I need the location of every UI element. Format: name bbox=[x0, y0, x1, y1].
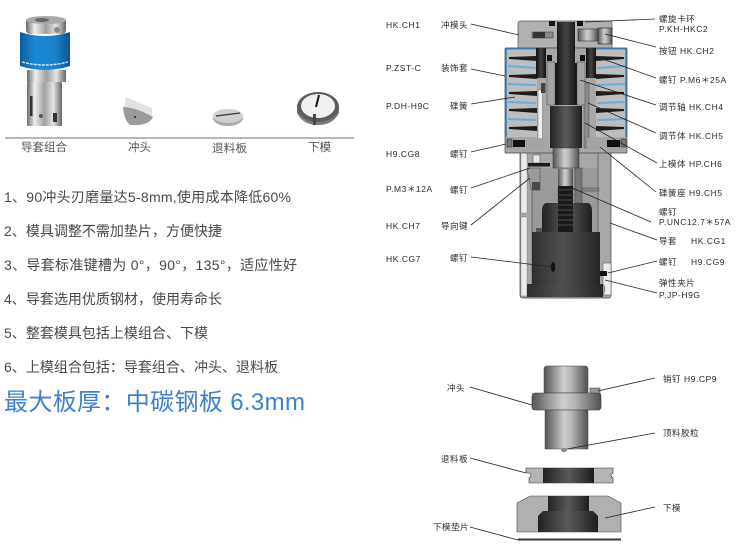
cap bbox=[518, 21, 612, 48]
labels and leaders: left bbox=[386, 20, 553, 267]
feature list: 6、上模组合包括：导套组合、冲头、退料板 bbox=[4, 359, 278, 375]
divider line bbox=[5, 137, 354, 139]
labels and leaders: bottom diagram: 顶料胶粒 bbox=[663, 428, 699, 438]
stripper plate bbox=[526, 468, 613, 483]
diagram: upper die cross-section bbox=[505, 21, 627, 298]
labels and leaders: left: HK.CH1 bbox=[386, 20, 420, 30]
feature list: 1、90冲头刃磨量达5-8mm,使用成本降低60% bbox=[4, 189, 291, 205]
labels and leaders: right: 螺钉 bbox=[659, 257, 677, 267]
silver cylinder bbox=[553, 148, 579, 168]
labels and leaders: right: 调节体 HK.CH5 bbox=[659, 131, 724, 141]
icon: punch photo bbox=[123, 97, 153, 125]
labels and leaders: left: 螺钉 bbox=[450, 149, 468, 159]
photo captions: 下模 bbox=[308, 141, 332, 154]
sleeve interior bbox=[532, 168, 598, 234]
lower-housing screws bbox=[506, 138, 626, 150]
labels and leaders: left: 导向键 bbox=[441, 221, 468, 231]
guide sleeve body bbox=[520, 148, 611, 298]
labels and leaders: right bbox=[570, 14, 731, 300]
labels and leaders: right: 螺旋卡环 bbox=[659, 14, 695, 24]
die head bbox=[542, 203, 592, 232]
labels and leaders: left: 螺钉 bbox=[450, 185, 468, 195]
labels and leaders: left: HK.CH7 bbox=[386, 221, 420, 231]
labels and leaders: right: P.KH-HKC2 bbox=[659, 24, 708, 34]
icon: guide sleeve assembly photo bbox=[20, 16, 70, 126]
heading: max plate thickness: 最大板厚：中碳钢板 6.3mm bbox=[4, 389, 305, 416]
labels and leaders: left: P.ZST-C bbox=[386, 63, 421, 73]
side rod bbox=[575, 168, 582, 203]
button screw bbox=[578, 29, 598, 41]
inner slots bbox=[538, 90, 542, 148]
labels and leaders: right: 弹性夹片 bbox=[659, 278, 695, 288]
labels and leaders: left: H9.CG8 bbox=[386, 149, 420, 159]
guide key bbox=[527, 168, 540, 190]
photo captions bbox=[21, 140, 332, 155]
labels and leaders: left: 装饰套 bbox=[441, 63, 468, 73]
labels and leaders: right: 螺钉 P.M6＊25A bbox=[659, 75, 727, 85]
labels and leaders: left: HK.CG7 bbox=[386, 254, 421, 264]
labels and leaders: left: 碟簧 bbox=[450, 101, 468, 111]
photo captions: 冲头 bbox=[128, 140, 151, 154]
punch bbox=[532, 366, 601, 452]
labels and leaders: bottom diagram: 销钉 H9.CP9 bbox=[663, 374, 717, 384]
photo captions: 导套组合 bbox=[21, 140, 68, 154]
labels and leaders: bottom diagram: 冲头 bbox=[447, 383, 465, 393]
clip bbox=[603, 263, 611, 295]
threaded screw bbox=[558, 186, 573, 232]
lower die bbox=[517, 496, 621, 532]
labels and leaders: bottom diagram: 下模垫片 bbox=[433, 522, 469, 532]
labels and leaders: right: 上模体 HP.CH6 bbox=[659, 159, 722, 169]
photo captions: 退料板 bbox=[212, 141, 248, 155]
lower shaft bbox=[558, 169, 573, 186]
labels and leaders: left: P.M3＊12A bbox=[386, 184, 433, 194]
labels and leaders: right: 螺钉 bbox=[659, 207, 677, 217]
labels and leaders: bottom diagram: 退料板 bbox=[441, 454, 468, 464]
labels and leaders: right: 调节轴 HK.CH4 bbox=[659, 102, 724, 112]
labels and leaders: right: 导套 bbox=[659, 236, 677, 246]
die shim bbox=[518, 538, 621, 540]
labels and leaders: right: P.UNC12.7＊57A bbox=[659, 217, 731, 227]
spring wells bbox=[506, 48, 626, 137]
labels and leaders: right: H9.CG9 bbox=[691, 257, 725, 267]
feature list bbox=[4, 189, 297, 375]
labels and leaders: left: 冲模头 bbox=[441, 20, 468, 30]
feature list: 5、整套模具包括上模组合、下模 bbox=[4, 325, 208, 341]
labels and leaders: bottom diagram: 下模 bbox=[663, 503, 681, 513]
diagram: punch, stripper and die bbox=[517, 366, 621, 540]
labels and leaders: left: 螺钉 bbox=[450, 253, 468, 263]
icon: stripper plate photo bbox=[213, 109, 243, 126]
labels and leaders: left: P.DH-H9C bbox=[386, 101, 429, 111]
small black seals bbox=[547, 55, 585, 61]
panel: product photos bbox=[20, 16, 339, 126]
labels and leaders: bottom diagram bbox=[433, 374, 717, 540]
bolts bbox=[536, 48, 546, 78]
feature list: 3、导套标准键槽为 0°，90°，135°，适应性好 bbox=[4, 257, 297, 273]
labels and leaders: right: P.JP-H9G bbox=[659, 290, 701, 300]
punch block bbox=[532, 232, 600, 284]
left pin bbox=[532, 32, 553, 38]
labels and leaders: right: 按钮 HK.CH2 bbox=[659, 46, 714, 56]
white cavities left of sleeve bbox=[521, 150, 527, 296]
feature list: 2、模具调整不需加垫片，方便快捷 bbox=[4, 223, 222, 239]
spring housing bbox=[505, 48, 627, 153]
feature list: 4、导套选用优质钢材，使用寿命长 bbox=[4, 291, 222, 307]
icon: lower die photo bbox=[297, 92, 339, 125]
labels and leaders: right: 碟簧座 H9.CH5 bbox=[659, 188, 723, 198]
central shaft bbox=[555, 22, 577, 105]
labels and leaders: right: HK.CG1 bbox=[691, 236, 726, 246]
